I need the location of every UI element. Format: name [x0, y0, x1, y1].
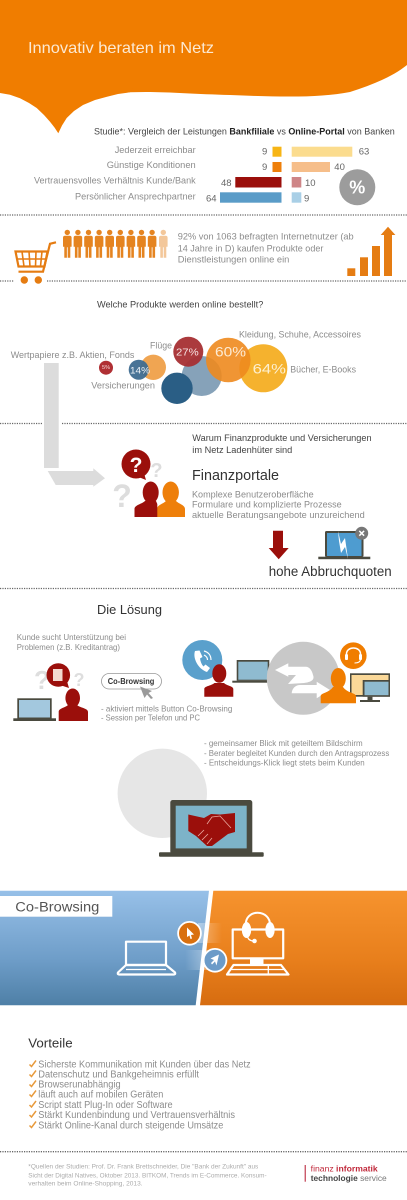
bar chart: 63: [359, 147, 369, 158]
icon: phone and customer: [182, 640, 233, 697]
text: shared view: - Entscheidungs-Klick liegt stets beim Kunden: [204, 758, 365, 768]
bubble labels: Wertpapiere z.B. Aktien, Fonds: [11, 350, 135, 361]
icon: shopping cart: [16, 242, 56, 284]
icon: exchange arrows: [267, 642, 340, 715]
text: high abandonment: hohe Abbruchquoten: [269, 564, 392, 579]
icon: confused customers: ?: [112, 478, 132, 514]
bubble labels: [11, 330, 361, 392]
bar chart: 40: [334, 162, 345, 173]
text: portal problems: aktuelle Beratungsangebote unzureichend: [192, 510, 365, 521]
footnote: sources: *Quellen der Studien: Prof. Dr. Frank Brettschneider, Die "Bank der Zukunft" aus: [28, 1164, 258, 1171]
icon: adviser with headset: [321, 642, 390, 703]
text: 92 percent: [178, 232, 354, 266]
bubble labels: Versicherungen: [91, 381, 155, 392]
heading: Finanzportale: Finanzportale: [192, 467, 279, 484]
panel: study comparison: [34, 126, 395, 205]
text: shared view: - Berater begleitet Kunden durch den Antragsprozess: [204, 748, 389, 758]
bubble chart: 64%: [253, 360, 286, 376]
row labels: [34, 145, 196, 202]
text: activated by button: - Session per Telefon und PC: [101, 713, 200, 723]
icon: percent badge: [339, 169, 375, 205]
bubble labels: Bücher, E-Books: [290, 364, 356, 375]
list: advantages: läuft auch auf mobilen Geräten: [38, 1089, 163, 1100]
text: portal problems: Formulare und komplizierte Prozesse: [192, 500, 342, 510]
list: advantages: Script statt Plug-In oder Software: [38, 1100, 173, 1111]
icon: white laptop: [118, 942, 175, 974]
row labels: Persönlicher Ansprechpartner: [75, 191, 196, 202]
icon: confused customers: ?: [130, 454, 142, 477]
text: customer seeks help: [17, 632, 126, 652]
icon: broken laptop: [318, 527, 370, 559]
icon: blue cursor: [204, 949, 226, 972]
icon: customer at laptop: [13, 663, 88, 721]
footnote: sources: [28, 1164, 267, 1187]
icon: confused customers: [112, 450, 185, 517]
study heading: Studie*: Vergleich der Leistungen Bankfiliale vs Online-Portal von Banken: [94, 126, 395, 137]
list: advantages: Browserunabhängig: [38, 1079, 121, 1090]
list: advantages: Stärkt Kundenbindung und Vertrauensverhältnis: [38, 1110, 235, 1121]
text: 92 percent: 92% von 1063 befragten Internetnutzer (ab: [178, 232, 354, 243]
icon: customer at laptop: ?: [74, 670, 84, 690]
list: advantages: Stärkt Online-Kanal durch steigende Umsätze: [38, 1120, 224, 1131]
text: 92 percent: Dienstleistungen online ein: [178, 255, 289, 266]
icon: confused customers: ?: [150, 460, 163, 482]
logo: [305, 1164, 387, 1183]
bubble chart: 27%: [176, 347, 199, 359]
footnote: sources: Sicht der Digital Natives, Oktober 2013. BITKOM, Trends im E-Commerce. Konsum-: [28, 1172, 267, 1179]
icon: laptop middle: [232, 660, 274, 683]
text: customer seeks help: Problemen (z.B. Kreditantrag): [17, 642, 120, 652]
check marks: [30, 1060, 36, 1128]
bubble chart: 14%: [130, 365, 151, 376]
button: Co-Browsing: [102, 674, 162, 699]
icon: white desktop with headset: [227, 913, 288, 974]
list: advantages: Datenschutz und Bankgeheimnis erfüllt: [38, 1069, 199, 1080]
header banner: [0, 0, 407, 133]
button: Co-Browsing: Co-Browsing: [108, 676, 154, 686]
bar chart: 10: [305, 178, 316, 189]
text: shared view: [204, 738, 389, 768]
bar chart: 9: [262, 147, 267, 158]
bubble labels: Kleidung, Schuhe, Accessoires: [239, 330, 361, 341]
text: activated by button: [101, 703, 233, 723]
bar chart: 9: [304, 194, 309, 204]
heading: solution: Die Lösung: [97, 602, 162, 617]
text: activated by button: - aktiviert mittels Button Co-Browsing: [101, 703, 233, 713]
bar chart: [206, 147, 369, 204]
row labels: Jederzeit erreichbar: [115, 145, 196, 156]
icon: percent badge: %: [349, 178, 365, 198]
arrow: grey L arrow: [44, 363, 105, 487]
bar chart: 9: [262, 162, 267, 173]
heading: why finance products: [192, 433, 372, 456]
text: 92 percent: 14 Jahre in D) kaufen Produkte oder: [178, 244, 323, 255]
bar chart: 48: [221, 178, 232, 189]
icon: ten persons: [63, 230, 168, 258]
icon: orange cursor: [178, 922, 201, 945]
row labels: Vertrauensvolles Verhältnis Kunde/Bank: [34, 176, 196, 187]
row labels: Günstige Konditionen: [107, 160, 196, 171]
list: advantages: Sicherste Kommunikation mit Kunden über das Netz: [38, 1059, 251, 1070]
bar chart: 64: [206, 194, 217, 204]
list: advantages: [30, 1059, 251, 1131]
bubble chart: 60%: [215, 344, 246, 360]
logo: technologie service: [311, 1173, 387, 1183]
bubble labels: Flüge: [150, 340, 172, 351]
text: customer seeks help: Kunde sucht Unterstützung bei: [17, 632, 126, 642]
heading: products: Welche Produkte werden online bestellt?: [97, 299, 263, 310]
heading: why finance products: Warum Finanzprodukte und Versicherungen: [192, 433, 372, 444]
banner heading: Co-Browsing: [15, 900, 99, 915]
title: Innovativ beraten im Netz: [28, 40, 214, 57]
heading: why finance products: im Netz Ladenhüter sind: [192, 445, 292, 456]
icon: laptop with handshake: [118, 749, 264, 857]
icon: customer at laptop: ?: [34, 665, 50, 695]
connection glow: [185, 923, 222, 970]
text: shared view: - gemeinsamer Blick mit geteiltem Bildschirm: [204, 738, 363, 748]
text: portal problems: [192, 489, 365, 521]
bubble chart: 5%: [102, 365, 111, 371]
heading: advantages: Vorteile: [28, 1036, 73, 1051]
logo: finanz informatik: [311, 1164, 378, 1174]
bubble chart: [99, 337, 287, 404]
panel: co-browsing banner: [0, 891, 407, 1005]
text: portal problems: Komplexe Benutzeroberfläche: [192, 489, 314, 500]
footnote: sources: verhalten beim Online-Shopping, 2013.: [28, 1180, 143, 1187]
icon: growth bars with arrow: [347, 227, 395, 276]
arrow: red down: [269, 531, 289, 559]
